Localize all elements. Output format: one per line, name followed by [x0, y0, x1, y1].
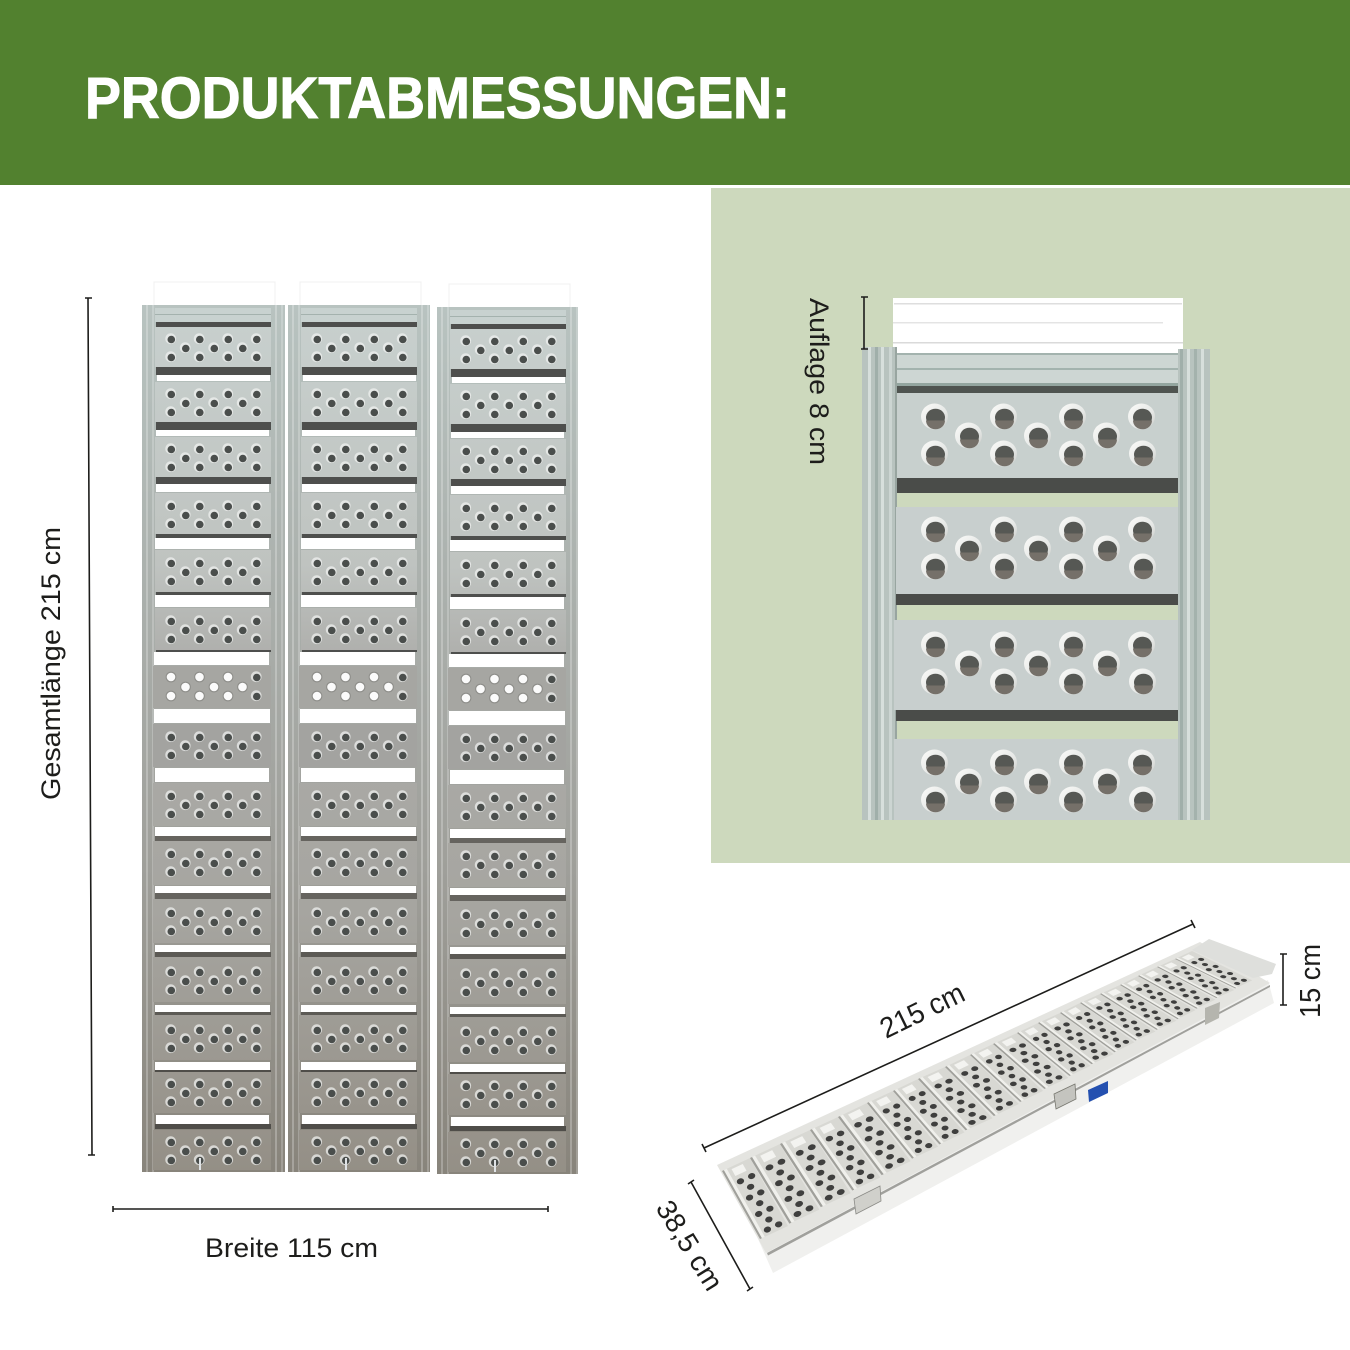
dimension: total length line	[85, 298, 95, 1155]
title: PRODUKTABMESSUNGEN:	[85, 66, 790, 131]
label: 215 cm: 215 cm	[875, 977, 970, 1045]
perspective: hinge far	[1205, 1002, 1220, 1025]
header band	[0, 0, 1350, 185]
panel: detail background	[711, 188, 1350, 863]
ramp: front view left	[142, 282, 285, 1172]
perspective: deck	[717, 942, 1270, 1253]
perspective: blue label	[1088, 1081, 1108, 1102]
dimension: support bracket	[861, 297, 868, 349]
detail: top crossbar	[897, 353, 1178, 394]
ramp: front view right	[437, 284, 580, 1174]
perspective: side	[755, 980, 1274, 1273]
dimension: width line	[113, 1206, 548, 1212]
dimension: width line 38,5 cm	[688, 1180, 753, 1291]
ramp: front view middle	[288, 282, 431, 1172]
detail: tread 1	[897, 393, 1178, 507]
ramp: perspective view	[717, 939, 1276, 1273]
label: support: Auflage 8 cm	[804, 298, 834, 465]
label: 15 cm: 15 cm	[1295, 944, 1327, 1018]
label: 38,5 cm: 38,5 cm	[650, 1195, 729, 1296]
label: total length: Gesamtlänge 215 cm	[36, 527, 66, 800]
detail: support flap	[893, 298, 1183, 354]
perspective: end flap	[1192, 939, 1276, 978]
detail: left rail	[862, 347, 897, 820]
dimension: length line 215 cm	[702, 920, 1195, 1152]
detail: tread 3	[894, 620, 1178, 739]
perspective: hinge near	[854, 1186, 881, 1214]
detail: tread 4	[894, 739, 1178, 820]
perspective: slats	[722, 951, 1252, 1239]
label: width: Breite 115 cm	[205, 1233, 378, 1263]
detail: ramp close-up	[862, 298, 1210, 820]
perspective: side stripe	[767, 985, 1270, 1256]
dimension: height bracket 15 cm	[1280, 954, 1287, 1005]
detail: right rail	[1178, 349, 1210, 820]
detail: tread 2	[896, 507, 1178, 619]
perspective: hinge middle	[1054, 1084, 1076, 1109]
